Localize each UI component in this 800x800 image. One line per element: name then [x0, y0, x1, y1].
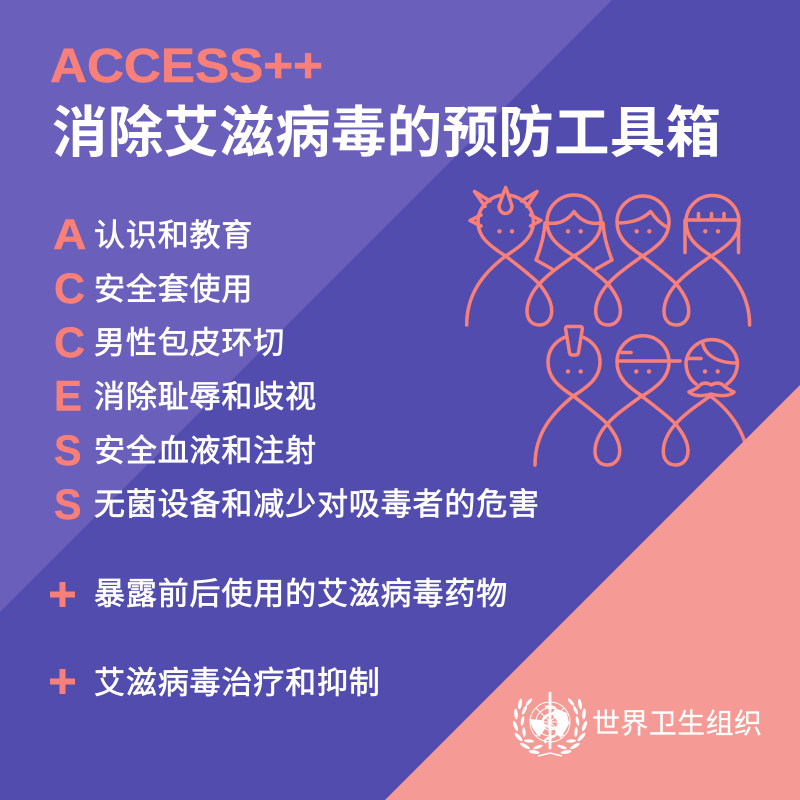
- laurel wreath, left: [512, 698, 543, 755]
- item plus text: medicines: 暴露前后使用的艾滋病毒药物: [94, 576, 508, 612]
- wreath tie: [538, 753, 562, 756]
- item S text: sterile equipment: 无菌设备和减少对吸毒者的危害: [94, 487, 540, 522]
- letter S second: S: [54, 481, 82, 529]
- item C text: circumcision: 男性包皮环切: [94, 326, 285, 360]
- person 5 head with mohawk: [548, 326, 600, 396]
- person 4 head with fringe: [685, 196, 739, 256]
- letter A: A: [53, 211, 86, 259]
- item A text: 认识和教育: [94, 218, 253, 253]
- light diagonal panel: [0, 0, 612, 612]
- illustration: group of people, top row: [467, 188, 750, 325]
- icon: WHO emblem: [512, 693, 588, 756]
- letter E: E: [54, 372, 82, 420]
- item plus text: treatment: 艾滋病毒治疗和抑制: [94, 666, 381, 700]
- person 2 head with long hair: [536, 195, 612, 269]
- plus sign 2: [50, 669, 75, 694]
- list: ACCESS++ items: [50, 211, 540, 700]
- person 6 head with cap: [617, 336, 680, 396]
- item E text: 消除耻辱和歧视: [94, 380, 317, 414]
- laurel wreath, right: [557, 698, 588, 755]
- figure chain, top row: [467, 256, 750, 325]
- letter S: S: [54, 427, 82, 475]
- illustration: group of people, bottom row: [535, 326, 750, 465]
- item C text: condoms: 安全套使用: [94, 272, 253, 307]
- organisation name: 世界卫生组织: [592, 708, 762, 739]
- continents: [529, 708, 569, 738]
- item S text: blood: 安全血液和注射: [94, 434, 317, 468]
- person 7 head with hair and moustache: [686, 340, 738, 396]
- staff and serpent: [543, 693, 557, 748]
- title: 消除艾滋病毒的预防工具箱: [52, 102, 721, 164]
- logo heading: ACCESS++: ACCESS++: [50, 40, 323, 93]
- globe: [530, 702, 570, 742]
- plus sign 1: [50, 582, 75, 607]
- figure chain, bottom row: [535, 396, 750, 465]
- pink corner triangle: [385, 385, 800, 800]
- letter C: C: [54, 265, 85, 313]
- letter C second: C: [54, 319, 85, 367]
- person 3 head with short hair: [617, 196, 669, 256]
- person 1 head with spiky hair: [470, 188, 541, 256]
